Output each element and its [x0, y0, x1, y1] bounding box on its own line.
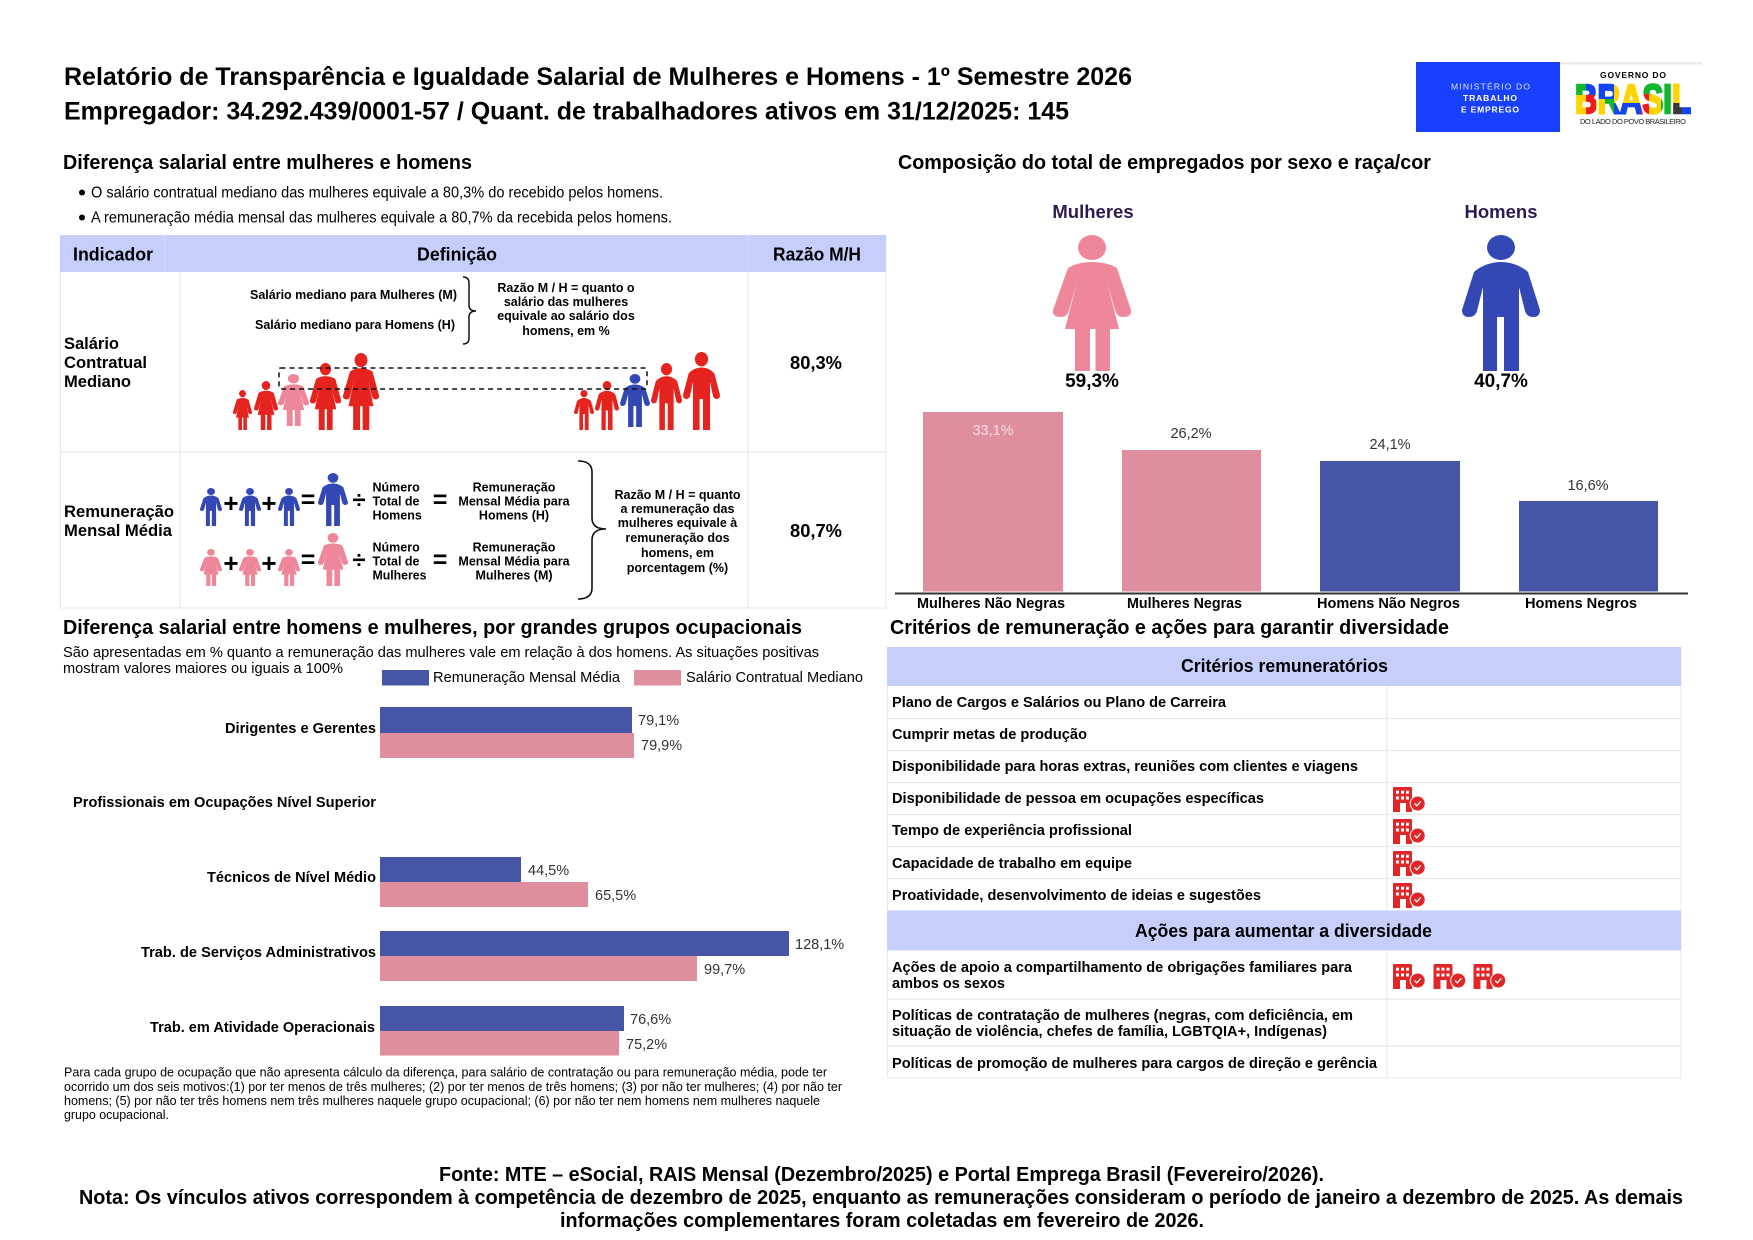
action rows	[892, 960, 1378, 1072]
formula: men: Total de	[372, 494, 420, 508]
formula: men: Número	[372, 480, 420, 494]
logo: Ministério do Trabalho e Emprego / Governo do Brasil: GOVERNO DO	[1600, 70, 1666, 80]
description text	[63, 644, 819, 677]
footnote	[64, 1064, 843, 1122]
formula: women: +	[261, 548, 277, 578]
group: Técnicos de Nível Médio: 65,5%	[595, 888, 636, 904]
formula: women: Número	[372, 540, 420, 554]
criteria rows: Disponibilidade de pessoa em ocupações específicas	[892, 791, 1264, 807]
formula: men: +	[261, 488, 277, 518]
source note: Fonte: MTE – eSocial, RAIS Mensal (Dezembro/2025) e Portal Emprega Brasil (Fevereiro/2026).	[439, 1164, 1324, 1186]
icons: company checks in criteria rows	[1393, 787, 1426, 908]
footnote: grupo ocupacional.	[64, 1107, 169, 1122]
icon: men share: Homens	[1464, 201, 1538, 222]
brace and definition: razão: a remuneração das	[621, 502, 735, 516]
table header: Indicador	[73, 244, 153, 264]
group: Trab. em Atividade Operacionais: 76,6%	[630, 1012, 671, 1028]
criteria rows: Plano de Cargos e Salários ou Plano de Carreira	[892, 695, 1227, 711]
icon: men share: 40,7%	[1474, 371, 1528, 392]
definition text: salário mediano: equivale ao salário dos	[497, 309, 635, 323]
row label: remuneração mensal média: Mensal Média	[64, 521, 173, 540]
bar chart: sexo e raça/cor: Mulheres Negras	[1127, 596, 1242, 612]
brace and definition: razão	[578, 461, 741, 599]
action rows: situação de violência, chefes de família, LGBTQIA+, Indígenas)	[892, 1024, 1327, 1040]
formula: men: Remuneração	[473, 480, 556, 494]
group: Trab. em Atividade Operacionais	[150, 1006, 671, 1056]
group: Trab. de Serviços Administrativos: Trab. de Serviços Administrativos	[141, 945, 376, 961]
bar chart: sexo e raça/cor: Mulheres Não Negras	[917, 596, 1065, 612]
icon: women share: Mulheres	[1052, 201, 1134, 222]
formula: women: Mulheres	[372, 568, 427, 582]
footnote: Para cada grupo de ocupação que não apresenta cálculo da diferença, para salário de contratação ou para remuneração média, pode ter	[64, 1064, 828, 1080]
formula: women: =	[301, 546, 315, 574]
definition text: salário mediano: Salário mediano para Mulheres (M)	[250, 287, 457, 302]
definition text: salário mediano: homens, em %	[522, 324, 610, 338]
group: Dirigentes e Gerentes: 79,9%	[641, 738, 682, 754]
group: Dirigentes e Gerentes: 79,1%	[638, 713, 679, 729]
definition text: salário mediano: salário das mulheres	[504, 295, 628, 309]
formula: men: Mensal Média para	[458, 494, 571, 508]
table header: Definição	[417, 244, 497, 264]
page title: Relatório de Transparência e Igualdade Salarial de Mulheres e Homens - 1º Semestre 2026	[64, 63, 1132, 91]
criteria rows: Cumprir metas de produção	[892, 727, 1087, 743]
logo: Ministério do Trabalho e Emprego / Governo do Brasil: BRASIL	[1575, 76, 1691, 122]
formula: men: Homens	[372, 508, 422, 522]
icon group: women and men medians	[233, 352, 720, 430]
panel: critérios de remuneração e ações	[887, 617, 1681, 1078]
icons: company checks in actions row	[1393, 964, 1506, 989]
legend	[382, 669, 863, 686]
bar chart: grupos ocupacionais	[73, 707, 844, 1056]
formula: women: =	[433, 546, 447, 574]
formula: men: =	[433, 486, 447, 514]
source note: Nota: Os vínculos ativos correspondem à competência de dezembro de 2025, enquanto as remunerações consideram o período de janeiro a dezembro de 2025. As demais	[79, 1187, 1683, 1209]
group: Trab. de Serviços Administrativos	[141, 931, 844, 981]
brace and definition: razão: porcentagem (%)	[627, 561, 728, 575]
row label: remuneração mensal média	[64, 502, 174, 540]
group: Trab. em Atividade Operacionais: 75,2%	[626, 1037, 667, 1053]
formula: women: Remuneração	[473, 540, 556, 554]
panel: composição por sexo e raça/cor	[895, 152, 1688, 612]
header: ações para aumentar a diversidade: Ações para aumentar a diversidade	[1135, 921, 1432, 941]
page title: Empregador: 34.292.439/0001-57 / Quant. de trabalhadores ativos em 31/12/2025: 145	[64, 98, 1069, 126]
source note: informações complementares foram coletadas em fevereiro de 2026.	[560, 1210, 1204, 1232]
logo: Ministério do Trabalho e Emprego / Governo do Brasil: E EMPREGO	[1461, 104, 1519, 114]
group: Trab. em Atividade Operacionais: Trab. em Atividade Operacionais	[150, 1020, 375, 1036]
brace and definition: razão: remuneração dos	[625, 531, 730, 545]
heading: Diferença salarial entre homens e mulheres, por grandes grupos ocupacionais	[63, 617, 802, 639]
formula: women: Mulheres (M)	[475, 568, 553, 582]
group: Técnicos de Nível Médio	[207, 857, 636, 907]
definition text: salário mediano: Salário mediano para Homens (H)	[255, 317, 455, 332]
brace and definition: razão: mulheres equivale à	[618, 516, 737, 530]
bar chart: sexo e raça/cor: 33,1%	[972, 423, 1014, 439]
bar chart: sexo e raça/cor: 26,2%	[1170, 426, 1212, 442]
logo: Ministério do Trabalho e Emprego / Governo do Brasil	[1416, 62, 1702, 132]
table header	[73, 244, 861, 264]
formula: women: ÷	[352, 547, 366, 574]
criteria rows	[892, 695, 1358, 904]
description text: mostram valores maiores ou iguais a 100%	[63, 660, 343, 677]
action rows: Políticas de promoção de mulheres para cargos de direção e gerência	[892, 1056, 1378, 1072]
logo: Ministério do Trabalho e Emprego / Governo do Brasil: MINISTÉRIO DO	[1451, 82, 1530, 92]
icon: men share	[1462, 201, 1540, 392]
formula: men: =	[301, 486, 315, 514]
formula: men: ÷	[352, 487, 366, 514]
row label: remuneração mensal média: Remuneração	[64, 502, 174, 521]
indicator table	[60, 235, 886, 608]
definition text: salário mediano: Razão M / H = quanto o	[497, 281, 635, 295]
formula: women: Total de	[372, 554, 420, 568]
bar chart: sexo e raça/cor	[895, 412, 1688, 612]
definition text: salário mediano	[250, 277, 635, 344]
formula: women: Mensal Média para	[458, 554, 571, 568]
row label: salário contratual mediano	[64, 334, 147, 391]
logo: Ministério do Trabalho e Emprego / Governo do Brasil: TRABALHO	[1463, 93, 1517, 103]
criteria rows: Disponibilidade para horas extras, reuniões com clientes e viagens	[892, 759, 1358, 775]
criteria rows: Capacidade de trabalho em equipe	[892, 856, 1132, 872]
criteria rows: Proatividade, desenvolvimento de ideias e sugestões	[892, 888, 1261, 904]
legend: Salário Contratual Mediano	[686, 669, 863, 686]
page title	[64, 63, 1132, 126]
bullet text block: A remuneração média mensal das mulheres equivale a 80,7% da recebida pelos homens.	[91, 210, 672, 226]
bullet text block	[79, 184, 672, 226]
row label: salário contratual mediano: Mediano	[64, 372, 131, 391]
group: Dirigentes e Gerentes: Dirigentes e Gerentes	[225, 721, 376, 737]
formula: women: +	[223, 548, 239, 578]
row label: salário contratual mediano: Salário	[64, 334, 119, 353]
icon: women share	[1052, 201, 1134, 392]
action rows: Políticas de contratação de mulheres (negras, com deficiência, em	[892, 1008, 1353, 1024]
source note	[79, 1164, 1683, 1232]
bar chart: sexo e raça/cor: Homens Negros	[1525, 596, 1637, 612]
formula: men	[200, 473, 571, 526]
formula: men: Homens (H)	[479, 508, 549, 522]
bar chart: sexo e raça/cor: 16,6%	[1567, 478, 1609, 494]
logo: Ministério do Trabalho e Emprego / Governo do Brasil: DO LADO DO POVO BRASILEIRO	[1580, 117, 1686, 126]
heading: Diferença salarial entre mulheres e homens	[63, 152, 472, 174]
criteria table	[887, 647, 1681, 1078]
bar chart: sexo e raça/cor: Homens Não Negros	[1317, 596, 1460, 612]
formula: men: +	[223, 488, 239, 518]
bar chart: sexo e raça/cor: 24,1%	[1369, 437, 1411, 453]
group: Dirigentes e Gerentes	[225, 707, 682, 758]
panel: diferença por grandes grupos ocupacionais	[63, 617, 863, 1122]
group: Profissionais em Ocupações Nível Superior: Profissionais em Ocupações Nível Superior	[73, 795, 376, 811]
heading: Critérios de remuneração e ações para garantir diversidade	[890, 617, 1449, 639]
header: critérios remuneratórios: Critérios remuneratórios	[1181, 656, 1388, 676]
footnote: homens; (5) por não ter três homens nem três mulheres naquele grupo ocupacional; (6) por não ter nem homens nem mulheres naquele	[64, 1093, 820, 1108]
footnote: ocorrido um dos seis motivos:(1) por ter menos de três mulheres; (2) por ter menos de três homens; (3) por não ter mulheres; (4) por não ter	[64, 1079, 843, 1094]
value: 80,3%: 80,3%	[790, 352, 842, 373]
group: Técnicos de Nível Médio: 44,5%	[528, 863, 569, 879]
action rows: ambos os sexos	[892, 976, 1005, 992]
value: 80,7%: 80,7%	[790, 520, 842, 541]
legend: Remuneração Mensal Média	[433, 669, 621, 686]
table header: Razão M/H	[773, 244, 861, 264]
description text: São apresentadas em % quanto a remuneração das mulheres vale em relação à dos homens. As situações positivas	[63, 644, 819, 661]
action rows: Ações de apoio a compartilhamento de obrigações familiares para	[892, 960, 1353, 976]
group: Trab. de Serviços Administrativos: 99,7%	[704, 962, 745, 978]
panel: diferença salarial entre mulheres e homens	[60, 152, 886, 608]
brace and definition: razão: Razão M / H = quanto	[614, 488, 741, 502]
group: Técnicos de Nível Médio: Técnicos de Nível Médio	[207, 870, 376, 886]
formula: women	[200, 533, 571, 586]
criteria rows: Tempo de experiência profissional	[892, 823, 1132, 839]
heading: Composição do total de empregados por sexo e raça/cor	[898, 152, 1431, 174]
row label: salário contratual mediano: Contratual	[64, 353, 147, 372]
group: Trab. de Serviços Administrativos: 128,1%	[795, 937, 844, 953]
brace and definition: razão: homens, em	[641, 546, 714, 560]
bullet text block: O salário contratual mediano das mulheres equivale a 80,3% do recebido pelos homens.	[91, 184, 663, 202]
icon: women share: 59,3%	[1065, 371, 1119, 392]
